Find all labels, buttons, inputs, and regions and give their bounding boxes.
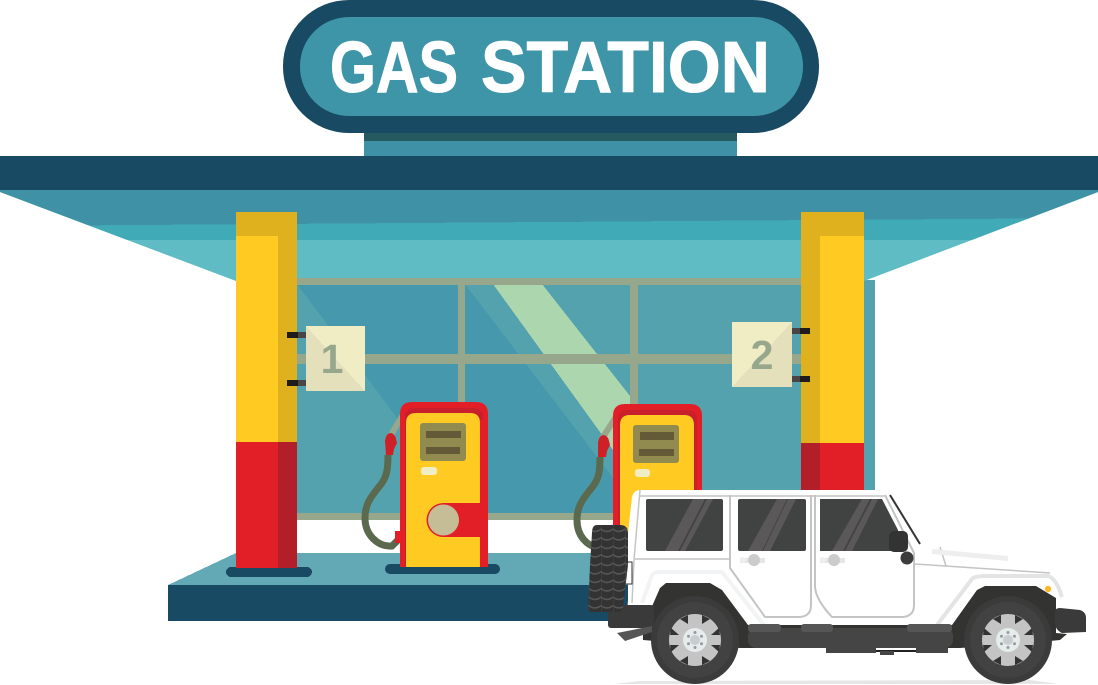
windshield bar [890, 495, 920, 544]
title [330, 28, 770, 108]
fender trims [642, 572, 764, 625]
bay sign 1 [287, 326, 365, 391]
rear wheel [651, 596, 739, 684]
body outlines [632, 490, 1050, 617]
fuel pump 2 [577, 404, 702, 548]
pillar 1 [226, 212, 312, 577]
side mirror [889, 531, 914, 564]
bay sign 1: 1 [321, 336, 343, 382]
door handles [740, 554, 845, 566]
hood vent [932, 549, 1008, 561]
bay sign 2: 2 [751, 332, 773, 378]
building window wall [297, 278, 875, 520]
floor and platform [168, 520, 807, 621]
spare tire [588, 525, 628, 612]
front bumper [1055, 608, 1086, 633]
underbody and arches [643, 583, 1067, 655]
fuel pump 1 [365, 402, 500, 574]
white jeep [588, 490, 1086, 684]
jeep body [625, 490, 1063, 640]
title: GAS [330, 28, 458, 108]
ground shadow [613, 680, 1058, 684]
roof canopy [0, 190, 1098, 285]
front wheel [964, 596, 1052, 684]
bay sign 2 [732, 322, 810, 387]
rear bumper [608, 605, 654, 641]
roof bar [0, 156, 1098, 190]
title: STATION [481, 28, 770, 108]
pillar 2 [801, 212, 864, 503]
reflection band [493, 284, 630, 450]
spare tire bracket [622, 562, 632, 584]
turn signal [1045, 586, 1051, 592]
sign: gas station [283, 0, 819, 157]
windows [646, 499, 898, 551]
